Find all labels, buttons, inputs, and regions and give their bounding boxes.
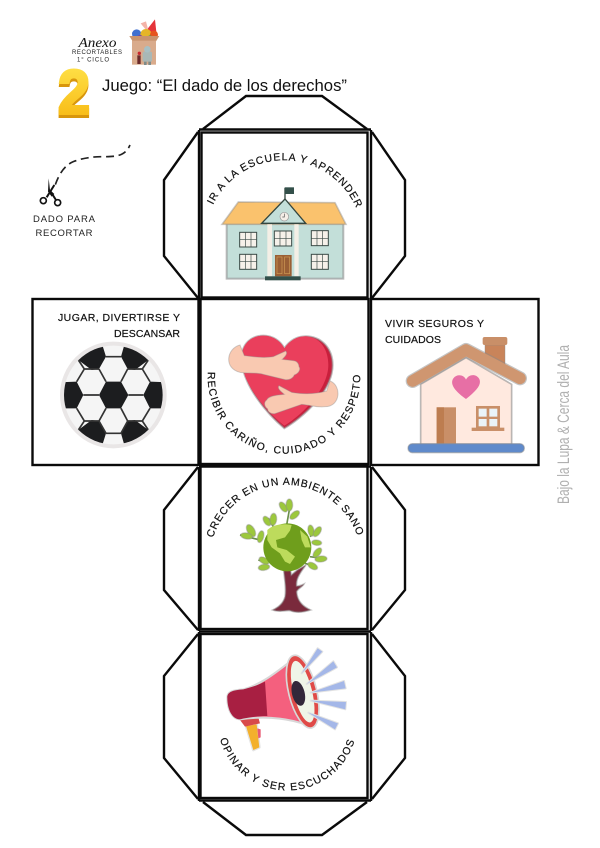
panel: house face: CUIDADOS <box>385 334 441 346</box>
caption: play and rest: JUGAR, DIVERTIRSE Y <box>58 312 180 324</box>
panel: soccer face <box>58 312 180 450</box>
caption: receive love: RECIBIR CARIÑO, CUIDADO Y RESPETO <box>208 372 360 454</box>
cut caption <box>33 214 96 239</box>
die net outline <box>32 96 538 835</box>
header: annex label <box>72 36 122 64</box>
number two badge: 2 <box>58 58 90 128</box>
caption: grow in healthy environment: CRECER EN UN AMBIENTE SANO <box>207 478 364 537</box>
caption: give opinions and be heard: OPINAR Y SER ESCUCHADOS <box>220 738 354 791</box>
icon: house <box>408 337 524 453</box>
panel: heart face <box>208 334 360 454</box>
icon: school <box>222 187 346 280</box>
cut caption: RECORTAR <box>36 228 93 239</box>
icon: scissors and dashed cut line <box>40 145 130 206</box>
icon: soccer ball <box>60 340 167 450</box>
cycle label: 1° CICLO <box>77 58 109 64</box>
panel: house face <box>385 318 524 453</box>
number two badge: 2 <box>58 62 90 130</box>
icon: earth tree <box>240 499 327 612</box>
annex word: Anexo <box>77 36 116 51</box>
panel: healthy environment face <box>207 478 364 613</box>
caption: go to school: IR A LA ESCUELA Y APRENDER <box>206 152 362 208</box>
panel: school face <box>206 152 362 280</box>
panel: speak up face <box>220 647 354 791</box>
cut caption: DADO PARA <box>33 214 96 225</box>
icon: toy box <box>129 19 159 65</box>
icon: heart with hugging arms <box>229 336 338 428</box>
caption: live safe: VIVIR SEGUROS Y <box>385 318 484 330</box>
watermark: Bajo la Lupa & Cerca del Aula <box>554 345 573 504</box>
title: Juego: “El dado de los derechos” <box>102 76 347 95</box>
cutouts label: RECORTABLES <box>72 50 122 56</box>
icon: megaphone <box>227 648 346 750</box>
panel: soccer face: DESCANSAR <box>114 328 180 340</box>
